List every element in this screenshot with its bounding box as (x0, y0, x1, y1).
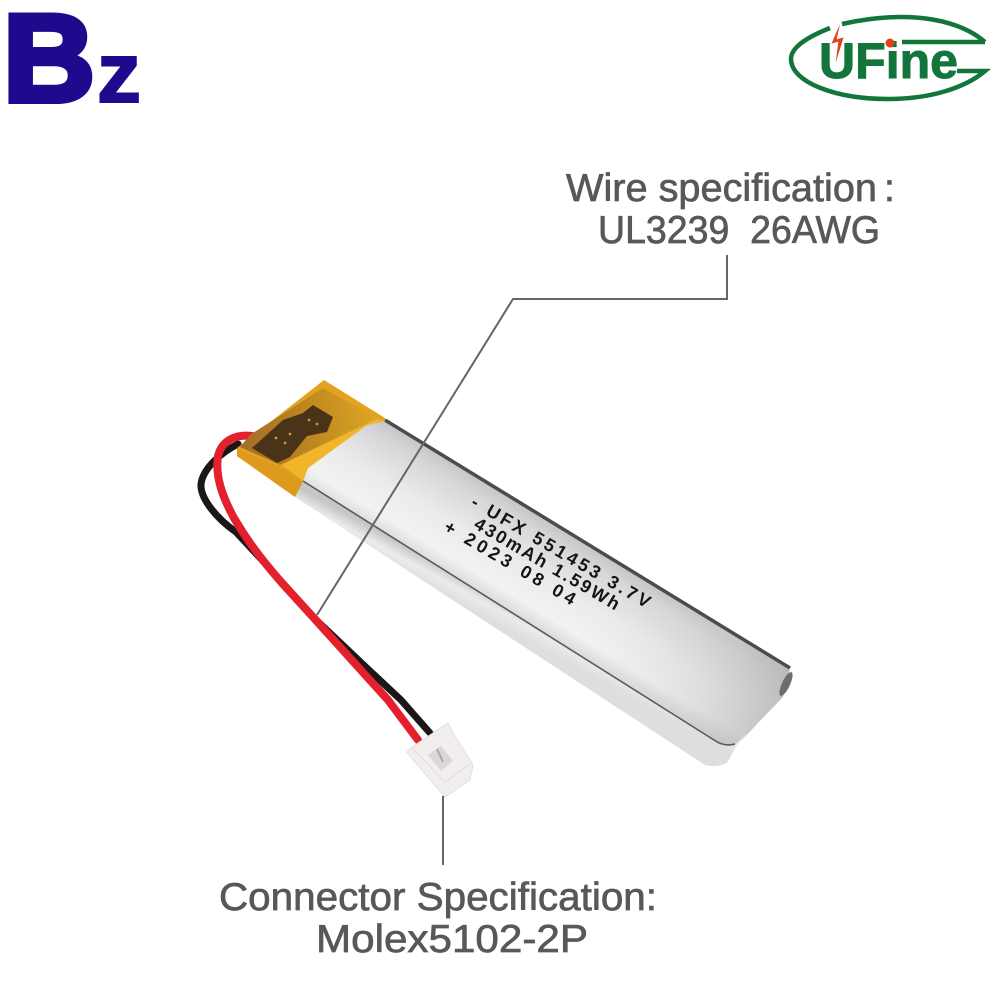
end tube (777, 671, 795, 697)
black wire (201, 444, 430, 733)
battery cell (295, 420, 795, 766)
wire specification callout text (566, 167, 895, 252)
wire specification callout text: : (884, 167, 895, 210)
wire specification callout text: UL3239 26AWG (598, 209, 880, 252)
connector housing (407, 723, 473, 797)
battery end shading (560, 580, 790, 745)
connector specification callout text: Molex5102-2P (316, 918, 588, 961)
battery label printing: 430mAh 1.59Wh (471, 514, 623, 614)
connector specification callout text: Connector Specification: (219, 876, 657, 919)
connector specification callout text (219, 876, 657, 961)
yellow polyimide tab (237, 380, 385, 497)
tab contacts (252, 405, 333, 463)
leader line: wire (317, 255, 727, 615)
logo: UFine (791, 17, 985, 99)
battery label printing: + 2023 08 04 (441, 517, 579, 609)
logo: UFine: UFine (819, 33, 958, 89)
battery top face (303, 420, 790, 745)
battery side face (295, 480, 783, 766)
logo: Bz brand (3, 0, 141, 128)
logo: Bz brand: z (97, 26, 141, 121)
top edge dark stripe (385, 420, 790, 668)
battery label printing: - UFX 551453 3.7V (468, 492, 654, 612)
leader line: connector (442, 796, 444, 865)
side seam line (303, 481, 735, 745)
wire specification callout text: Wire specification (566, 167, 877, 210)
red wire (217, 436, 418, 740)
